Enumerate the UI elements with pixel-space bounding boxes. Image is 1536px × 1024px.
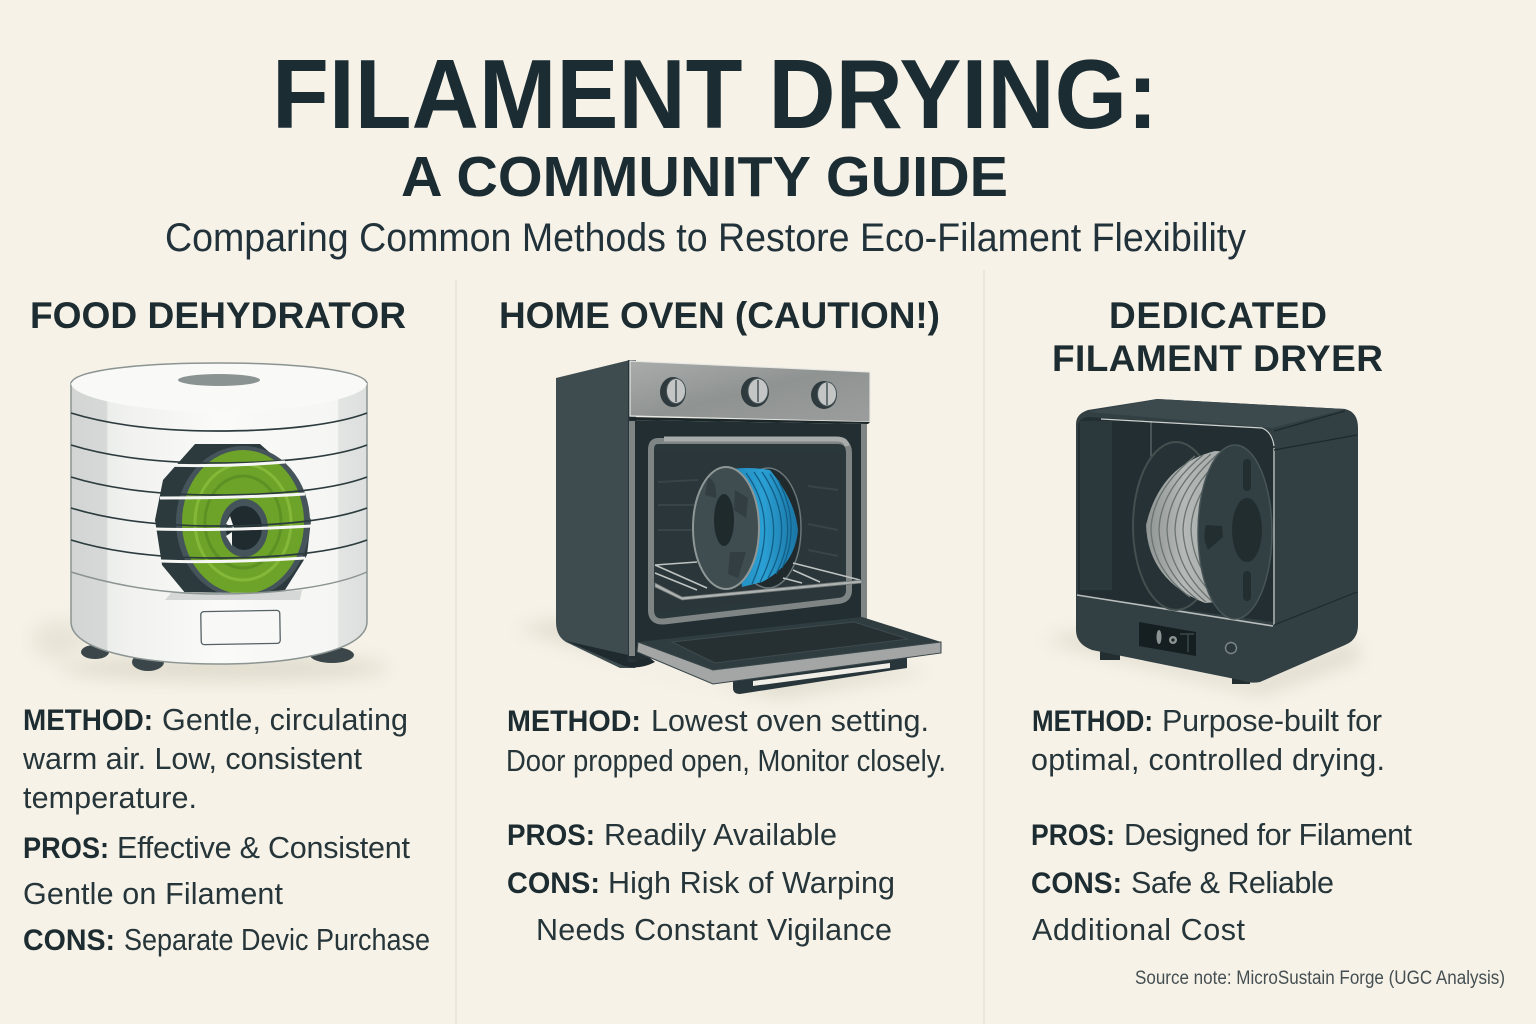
heading: dedicated filament dryer: DEDICATED (1109, 295, 1327, 336)
text: oven cons: High Risk of Warping (608, 866, 895, 900)
text: oven method (506, 704, 946, 778)
text: dryer cons: Additional Cost (1032, 913, 1246, 947)
panel: home oven (499, 295, 946, 947)
text: dehydrator method: temperature. (23, 781, 197, 815)
text: dryer method: Purpose-built for (1162, 704, 1382, 738)
oven rack (655, 562, 862, 600)
oven window (651, 441, 849, 622)
text: dryer pros: Designed for Filament (1124, 818, 1413, 852)
tagline: Comparing Common Methods to Restore Eco-Filament Flexibility (165, 216, 1246, 260)
green spool (155, 444, 311, 598)
tray lines (71, 413, 367, 594)
text: dehydrator method: warm air. Low, consistent (22, 742, 363, 776)
text: dryer pros: PROS: (1031, 819, 1115, 852)
text: oven cons (507, 866, 895, 947)
text: dehydrator method (22, 703, 408, 815)
oven knobs (660, 377, 837, 409)
text: dehydrator pros: PROS: (23, 832, 109, 865)
text: dryer method: optimal, controlled drying. (1031, 743, 1385, 777)
text: oven pros: PROS: (507, 819, 595, 852)
text: dryer cons: CONS: (1031, 867, 1122, 900)
panel: food dehydrator (22, 295, 430, 957)
text: dryer cons (1031, 866, 1334, 947)
text: oven method: METHOD: (507, 705, 641, 738)
text: oven cons: CONS: (507, 867, 600, 900)
dryer control panel (1139, 622, 1236, 656)
icon: food dehydrator with green spool (32, 363, 390, 681)
subtitle heading: A COMMUNITY GUIDE (401, 145, 1008, 209)
icon: filament dryer with gray spool (1042, 399, 1360, 695)
text: dehydrator pros (23, 831, 411, 911)
icon: open oven with blue spool (515, 360, 941, 698)
text: oven cons: Needs Constant Vigilance (536, 913, 892, 947)
text: dehydrator method: Gentle, circulating (162, 703, 408, 737)
heading: food dehydrator: FOOD DEHYDRATOR (30, 295, 406, 336)
heading: dedicated filament dryer (1052, 295, 1383, 379)
text: dehydrator method: METHOD: (23, 704, 153, 737)
text: dehydrator cons (23, 923, 430, 957)
heading: dedicated filament dryer: FILAMENT DRYER (1052, 338, 1383, 379)
title: FILAMENT DRYING: (272, 39, 1158, 149)
text: oven method: Lowest oven setting. (651, 704, 929, 738)
oven door (638, 617, 941, 670)
text: dryer cons: Safe & Reliable (1131, 866, 1334, 900)
blue spool (693, 467, 801, 589)
text: oven pros: Readily Available (604, 818, 837, 852)
source note: Source note: MicroSustain Forge (UGC Analysis) (1135, 968, 1505, 989)
text: dehydrator pros: Effective & Consistent (117, 831, 411, 865)
heading: home oven: HOME OVEN (CAUTION!) (499, 295, 940, 336)
text: dryer method (1031, 704, 1385, 777)
text: dehydrator pros: Gentle on Filament (23, 877, 284, 911)
gray spool (1133, 442, 1272, 619)
text: oven method: Door propped open, Monitor closely. (506, 744, 946, 778)
text: dehydrator cons: CONS: (23, 924, 115, 957)
text: dryer method: METHOD: (1032, 705, 1153, 738)
panel: dedicated filament dryer (1031, 295, 1413, 947)
text: dehydrator cons: Separate Devic Purchase (124, 923, 430, 957)
